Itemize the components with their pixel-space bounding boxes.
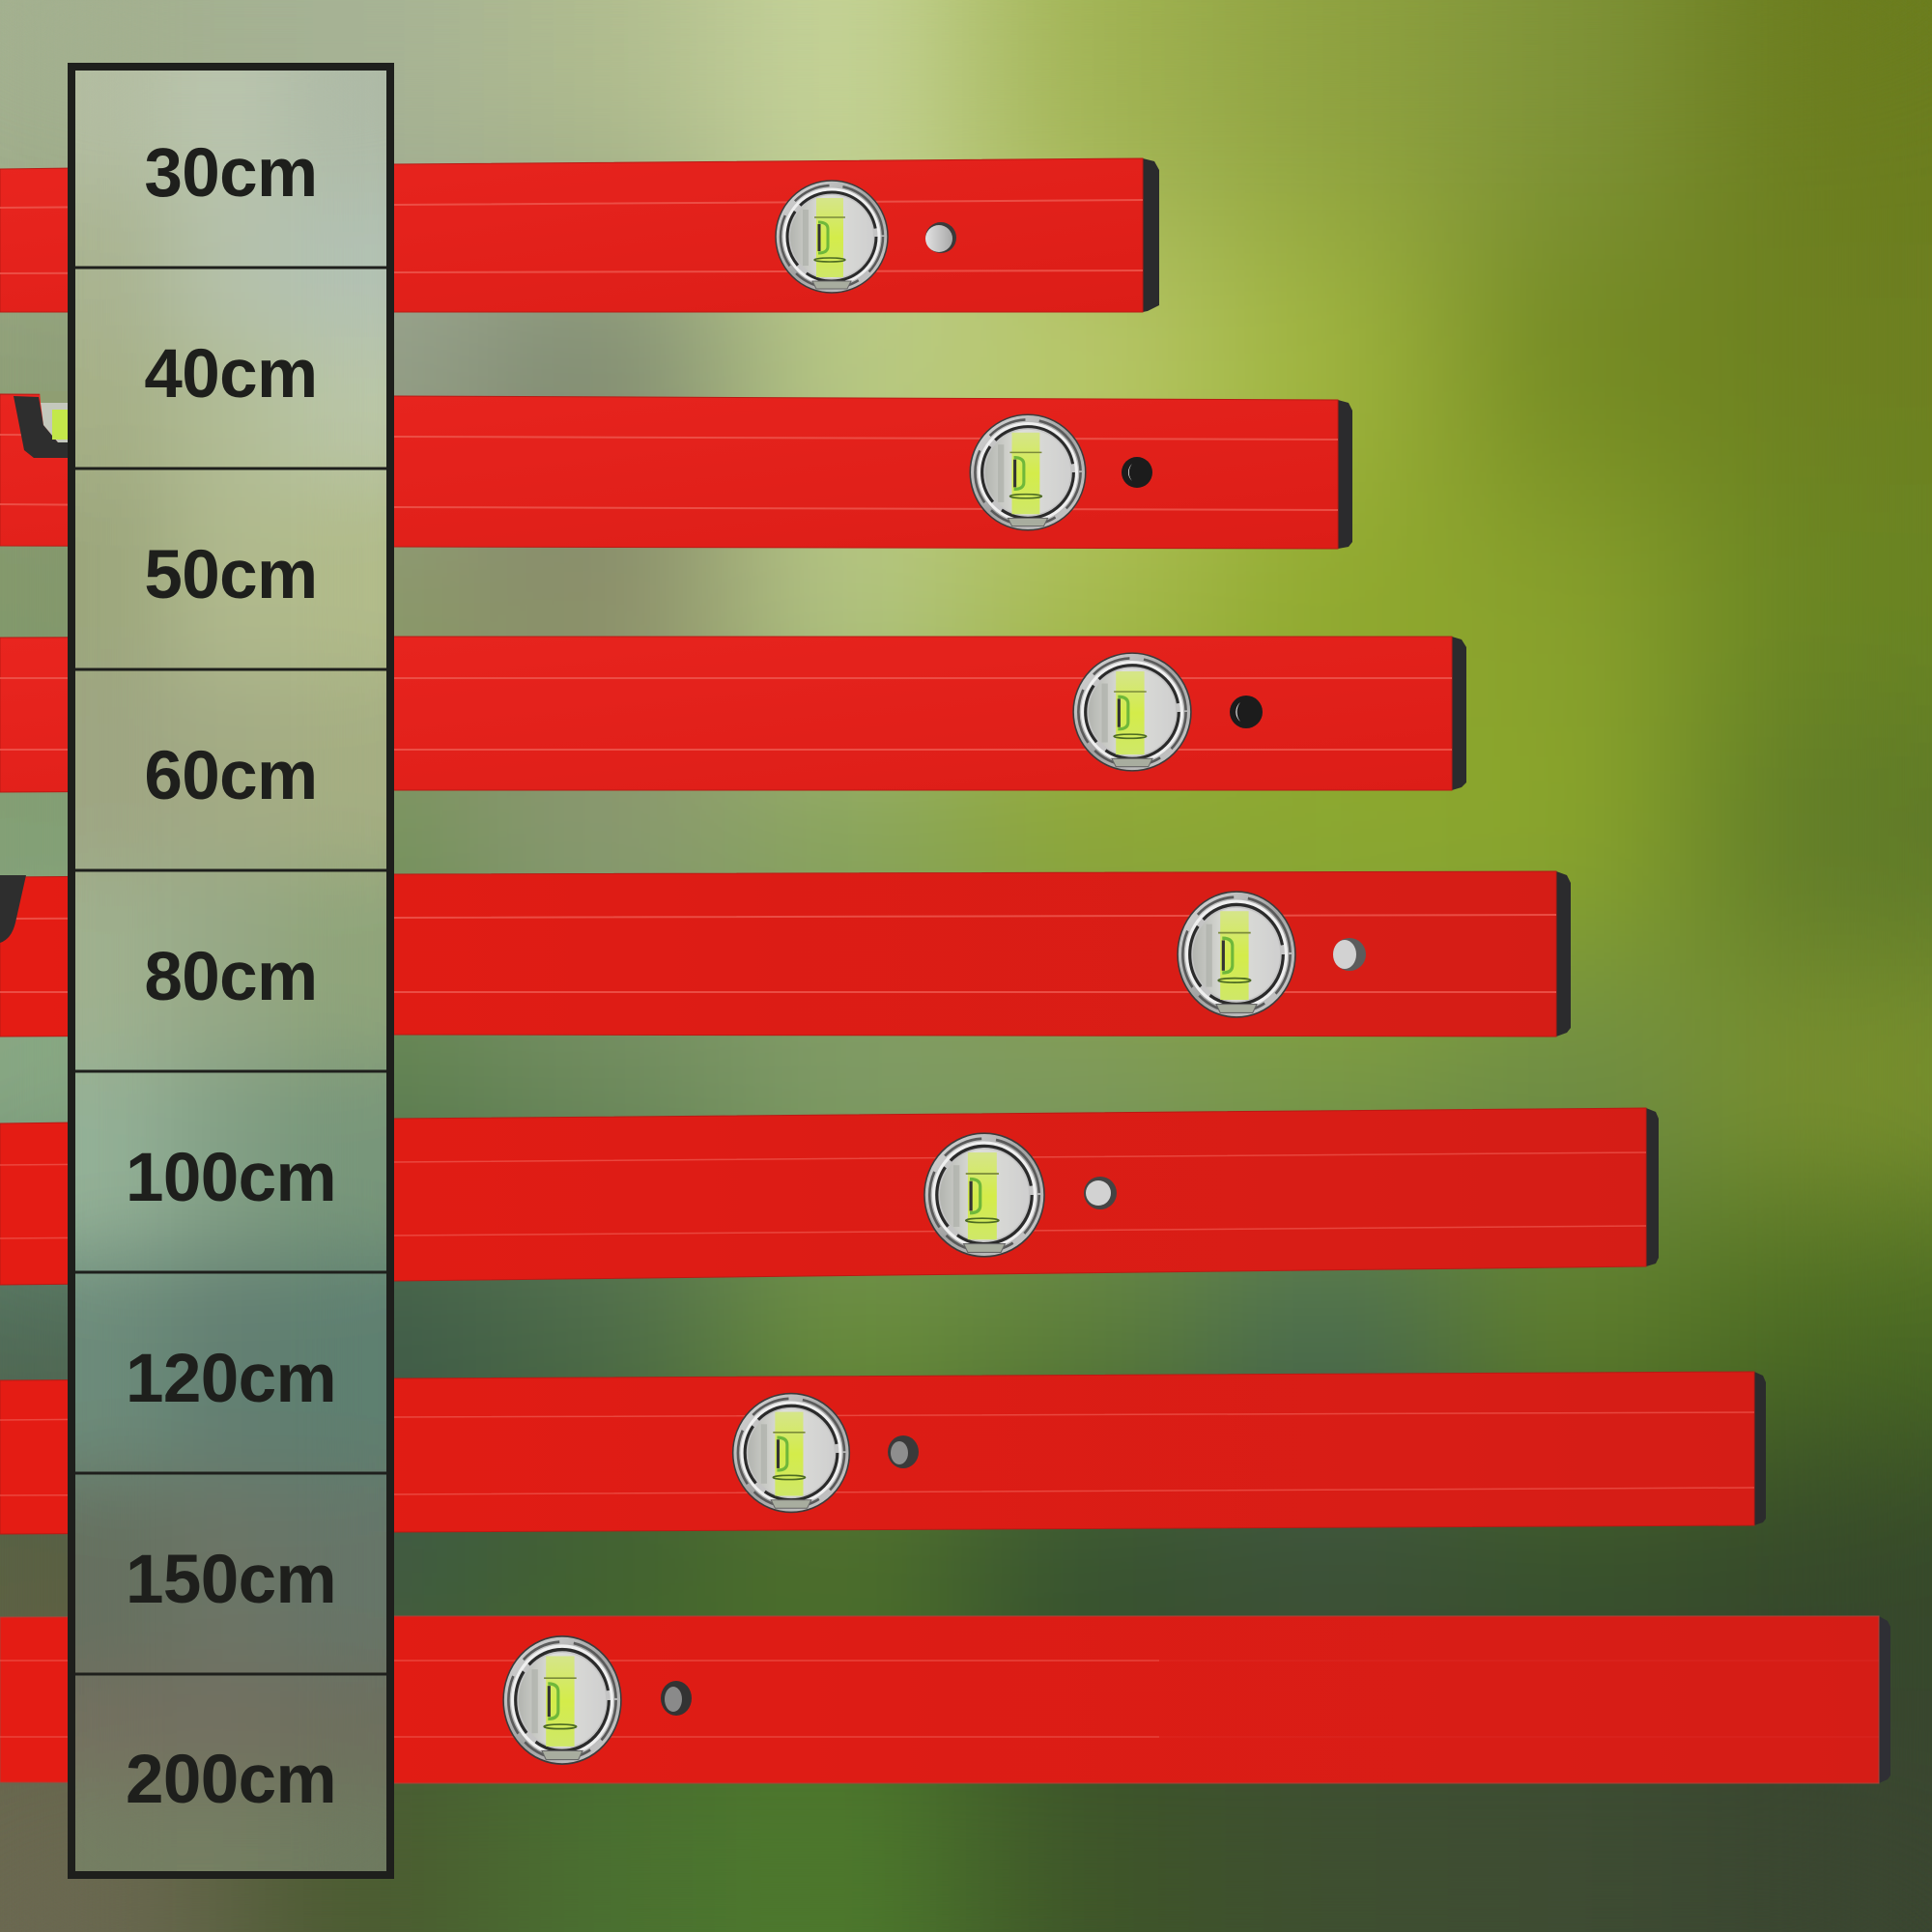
label: 120cm: 120cm <box>126 1341 336 1417</box>
label: 60cm: 60cm <box>144 738 318 814</box>
label: 30cm: 30cm <box>144 135 318 212</box>
spirit level 2 <box>0 391 1352 549</box>
panel border and row dividers <box>68 63 394 1879</box>
label: 50cm: 50cm <box>144 537 318 613</box>
label: 80cm: 80cm <box>144 939 318 1015</box>
spirit level 5 <box>0 1108 1659 1285</box>
spirit level 3 <box>0 637 1466 792</box>
size panel <box>68 63 394 1879</box>
spirit level 4 <box>0 871 1571 1037</box>
label: 150cm: 150cm <box>126 1542 336 1618</box>
label: 200cm: 200cm <box>126 1742 336 1818</box>
label: 100cm: 100cm <box>126 1140 336 1216</box>
label: 40cm: 40cm <box>144 336 318 412</box>
spirit level 6 <box>0 1372 1766 1534</box>
panel frosted fill <box>68 63 394 1879</box>
spirit level 1 <box>0 158 1159 312</box>
spirit level 7 <box>0 1616 1890 1783</box>
